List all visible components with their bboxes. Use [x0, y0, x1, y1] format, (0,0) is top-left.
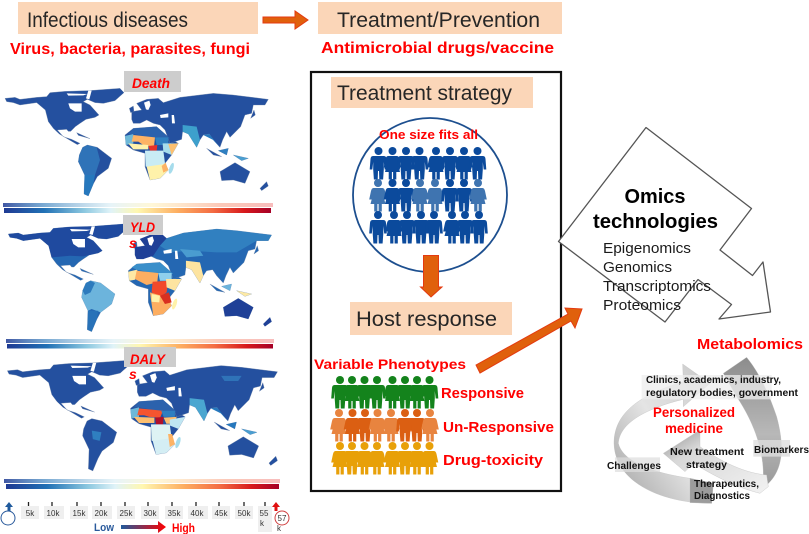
label: personalized medicine	[653, 405, 735, 436]
axis labels: k	[260, 519, 265, 528]
heading box: treatment strategy: Treatment strategy	[337, 82, 512, 105]
list: omics types	[603, 240, 711, 314]
labels: cycle stakeholders: regulatory bodies, government	[646, 388, 799, 399]
label: new treatment strategy: New treatment	[670, 447, 745, 458]
axis labels: 40k	[191, 509, 204, 518]
axis labels: 35k	[168, 509, 181, 518]
text: one size fits all: One size fits all	[379, 127, 478, 142]
icon: red high marker: 57	[278, 514, 287, 523]
people: toxicity yellow	[331, 442, 438, 474]
heading box: host response	[350, 302, 512, 335]
cycle: personalized medicine	[607, 357, 809, 503]
label: new treatment strategy	[670, 447, 745, 471]
label: new treatment strategy: strategy	[686, 460, 727, 471]
axis labels: 50k	[238, 509, 251, 518]
heading: omics technologies: Omics	[624, 186, 686, 208]
list: omics types: Epigenomics	[603, 240, 691, 257]
circle: one size fits all	[353, 118, 507, 272]
heading: metabolomics: Metabolomics	[697, 336, 803, 353]
heading box: treatment strategy	[331, 77, 533, 108]
label: therapeutics, diagnostics: Diagnostics	[694, 491, 750, 502]
label tab: YLDs	[123, 215, 163, 251]
text: variable phenotypes: Variable Phenotypes	[314, 356, 466, 372]
text: pathogens: Virus, bacteria, parasites, fungi	[10, 41, 250, 58]
world map: YLDs	[8, 224, 272, 332]
label tab: Death: Death	[132, 75, 170, 91]
axis labels: 10k	[47, 509, 60, 518]
icon: blue low marker	[1, 502, 15, 525]
axis labels: 55	[260, 509, 269, 518]
label: biomarkers: Biomarkers	[754, 445, 809, 456]
omics arrow outline with text	[558, 128, 770, 322]
people rows: uniform group	[369, 147, 488, 244]
axis labels: 15k	[73, 509, 86, 518]
heading: omics technologies: technologies	[593, 211, 718, 233]
heading box: host response: Host response	[356, 308, 497, 331]
map panel: DALYs	[4, 360, 280, 489]
heading: treatment/prevention: Treatment/Prevention	[337, 9, 540, 32]
label: challenges: Challenges	[607, 461, 661, 472]
label: drug-toxicity: Drug-toxicity	[443, 452, 544, 469]
colour scale: YLDs	[6, 339, 274, 348]
legend label: low: Low	[94, 522, 114, 534]
label: personalized medicine: medicine	[665, 421, 723, 436]
heading: infectious diseases: Infectious diseases	[27, 9, 188, 32]
colour scale: DALYs	[4, 479, 280, 489]
arrow: strategy to host response	[420, 256, 442, 297]
people: responsive green	[331, 376, 438, 408]
arrow: diseases to treatment	[263, 11, 308, 29]
axis labels: 25k	[120, 509, 133, 518]
panel: treatment strategy box	[311, 72, 561, 491]
heading: omics technologies	[593, 186, 718, 233]
map panel: YLDs	[6, 224, 274, 348]
people: unresponsive orange	[330, 409, 439, 442]
list: omics types: Transcriptomics	[603, 278, 711, 295]
arrow: phenotypes to omics	[476, 308, 582, 373]
label: therapeutics, diagnostics: Therapeutics,	[694, 479, 759, 490]
list: omics types: Genomics	[603, 259, 672, 276]
axis labels: 5k	[26, 509, 35, 518]
list: omics types: Proteomics	[603, 297, 681, 314]
label tab: DALYs: s	[129, 366, 137, 382]
label tab: YLDs: YLD	[130, 219, 155, 235]
axis labels: 20k	[95, 509, 108, 518]
label: responsive: Responsive	[441, 385, 524, 402]
arrow: low to high	[121, 521, 166, 533]
text: antimicrobial drugs: Antimicrobial drugs/vaccine	[321, 40, 554, 57]
arrow outline	[558, 128, 770, 322]
icon: red high marker	[272, 502, 289, 533]
label tab: DALYs	[124, 347, 176, 382]
label tab: DALYs: DALY	[130, 351, 167, 367]
world map: DALYs	[7, 360, 278, 471]
axis labels	[21, 502, 272, 532]
label: personalized medicine: Personalized	[653, 405, 735, 420]
axis labels: 45k	[215, 509, 228, 518]
labels: cycle stakeholders: Clinics, academics, industry,	[646, 375, 781, 386]
label: therapeutics, diagnostics	[694, 479, 759, 502]
panel: infectious diseases heading box	[18, 2, 258, 34]
panel: treatment heading box	[318, 2, 562, 34]
label tab: YLDs: s	[129, 235, 137, 251]
colour scale: Death	[3, 203, 273, 213]
world map: Death	[5, 88, 268, 196]
legend: axis ticks and low-high scale	[1, 502, 289, 534]
icon: red high marker: k	[277, 524, 282, 533]
cycle arrows	[614, 357, 790, 503]
labels: cycle stakeholders	[646, 375, 799, 399]
map panel: Death	[3, 88, 273, 213]
label tab: Death	[124, 71, 181, 92]
label: un-responsive: Un-Responsive	[443, 419, 554, 436]
axis labels: 30k	[144, 509, 157, 518]
